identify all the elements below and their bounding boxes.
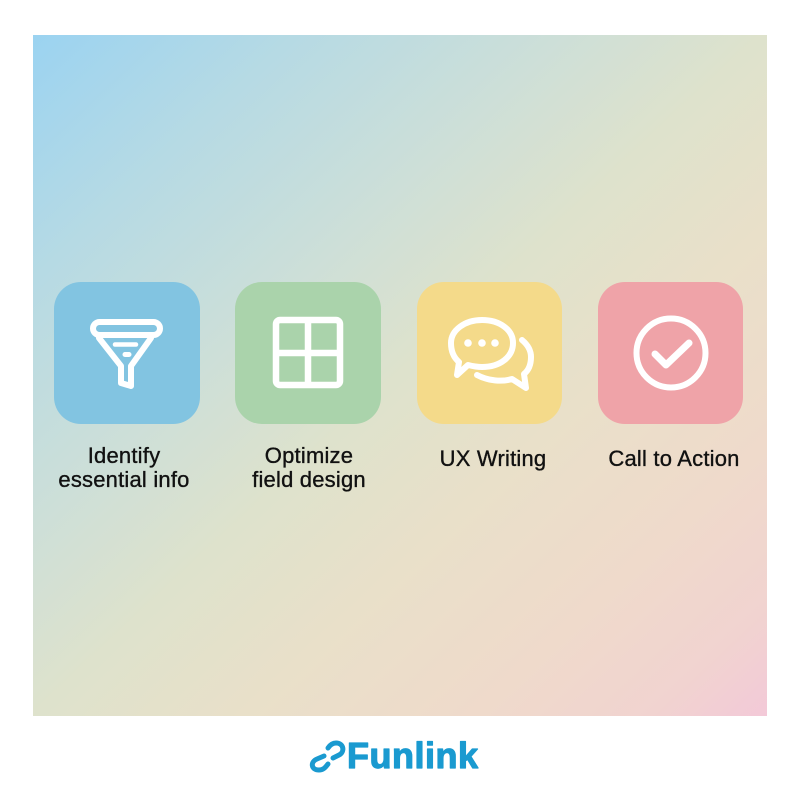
icon: funnel bbox=[90, 319, 163, 389]
label: optimize field design: Optimize bbox=[265, 443, 353, 468]
icon: chat bubbles bbox=[448, 317, 534, 391]
label: optimize field design: field design bbox=[252, 467, 366, 492]
wordmark: Funlink bbox=[347, 735, 479, 776]
label: call to action: Call to Action bbox=[608, 446, 740, 471]
logo: Funlink bbox=[310, 735, 479, 776]
label: identify essential info: essential info bbox=[58, 467, 190, 492]
icon: check circle bbox=[634, 316, 708, 390]
icon: grid bbox=[272, 316, 344, 388]
label: identify essential info bbox=[58, 443, 190, 492]
panel: gradient background bbox=[33, 35, 767, 716]
label: ux writing: UX Writing bbox=[440, 446, 546, 471]
card: ux writing bbox=[417, 282, 562, 424]
card: optimize field design bbox=[235, 282, 381, 424]
card: call to action bbox=[598, 282, 743, 424]
card: identify essential info bbox=[54, 282, 200, 424]
icon: chain link bbox=[312, 743, 343, 770]
label: identify essential info: Identify bbox=[88, 443, 160, 468]
label: optimize field design bbox=[252, 443, 366, 492]
